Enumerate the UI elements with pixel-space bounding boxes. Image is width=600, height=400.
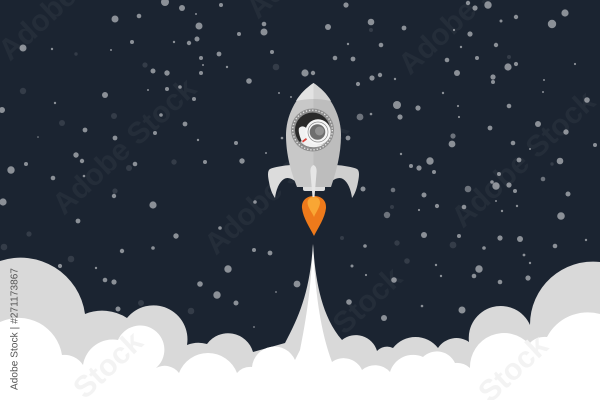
left fin [268,165,295,198]
side credit text: Adobe Stock | #271173867 [10,268,20,390]
watermark text on sky: Adobe Stock [46,72,203,221]
watermark text on sky: Adobe Stock [445,85,600,234]
dim stars [1,28,554,314]
nozzle [303,186,325,191]
watermark text on clouds [67,325,555,400]
rocket [268,83,359,236]
watermark text on sky: Adobe Stock [198,112,355,261]
nose cone [296,83,314,101]
flame [302,196,326,236]
porthole [291,108,334,152]
hull [286,83,314,187]
right fin [332,165,359,198]
exhaust streak [310,165,317,197]
astronaut [299,119,331,147]
grey back cloud layer with smoke trail [0,244,600,400]
white front cloud layer with smoke trail [0,244,600,400]
